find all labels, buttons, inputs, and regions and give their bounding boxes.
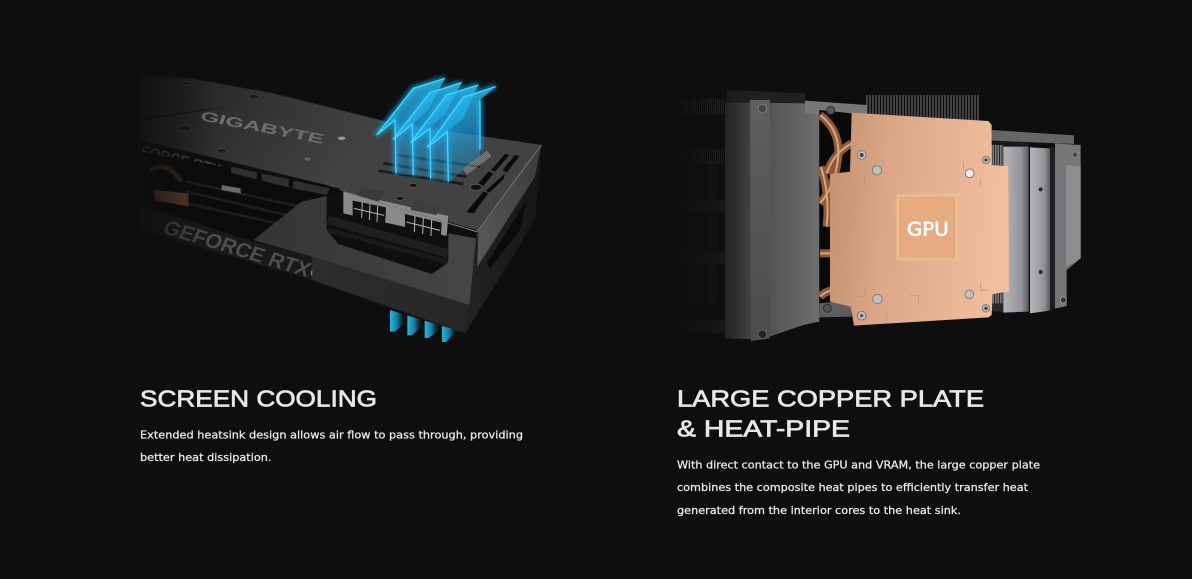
- GPU chip box: [896, 194, 958, 261]
- image: copper plate and heat-pipe cooler: [675, 83, 1081, 347]
- heading: large copper plate and heat-pipe: & HEAT-PIPE: [677, 416, 850, 442]
- blue airflow arrows bottom: [390, 310, 457, 342]
- backplate: [140, 75, 542, 230]
- text: screen cooling description: Extended heatsink design allows air flow to pass through, providing: [140, 428, 523, 442]
- center frame: [805, 101, 867, 120]
- GPU chip box: GPU: [907, 219, 949, 241]
- plate screws: [857, 151, 990, 320]
- bevel shroud: [253, 196, 477, 305]
- text: copper plate description: combines the composite heat pipes to efficiently transfer heat: [677, 481, 1029, 494]
- right frame: [992, 130, 1074, 144]
- heading: large copper plate and heat-pipe: LARGE COPPER PLATE: [677, 386, 984, 412]
- image: graphics card with cooling airflow arrows: [137, 70, 542, 342]
- heading: large copper plate and heat-pipe: [677, 386, 984, 442]
- top edge rail left: [727, 90, 805, 105]
- screws on plate: [178, 81, 259, 153]
- gray side panel: [725, 102, 819, 339]
- power connectors: [343, 187, 448, 239]
- blue airflow arrows top: [377, 78, 496, 183]
- product name: GEFORCE RTX: [160, 216, 314, 282]
- text: screen cooling description: better heat dissipation.: [140, 451, 272, 464]
- mirrored product name on plate edge: FORCE RTX: [139, 143, 222, 179]
- text: screen cooling description: [140, 428, 523, 464]
- copper plate: [830, 113, 1009, 326]
- top fins: [867, 68, 980, 148]
- left heatsink fins: [677, 107, 725, 283]
- text: copper plate description: [677, 458, 1040, 517]
- bracket cutouts: [467, 154, 519, 213]
- backplate logo: GIGABYTE: [198, 109, 326, 147]
- text: copper plate description: generated from the interior cores to the heat sink.: [677, 504, 961, 517]
- heading: screen cooling: SCREEN COOLING: [140, 386, 377, 412]
- shroud lower left: [140, 205, 312, 280]
- vent slots: [378, 155, 480, 184]
- heat pipes: [820, 115, 852, 297]
- indicator: [311, 271, 312, 275]
- panel strip: [750, 100, 770, 341]
- text: copper plate description: With direct contact to the GPU and VRAM, the large copper plate: [677, 458, 1040, 472]
- plate markings: [856, 159, 988, 323]
- side fins: [140, 152, 340, 242]
- copper pipe peek: [153, 190, 188, 207]
- end bracket: [465, 145, 542, 333]
- lower shroud: [312, 257, 469, 333]
